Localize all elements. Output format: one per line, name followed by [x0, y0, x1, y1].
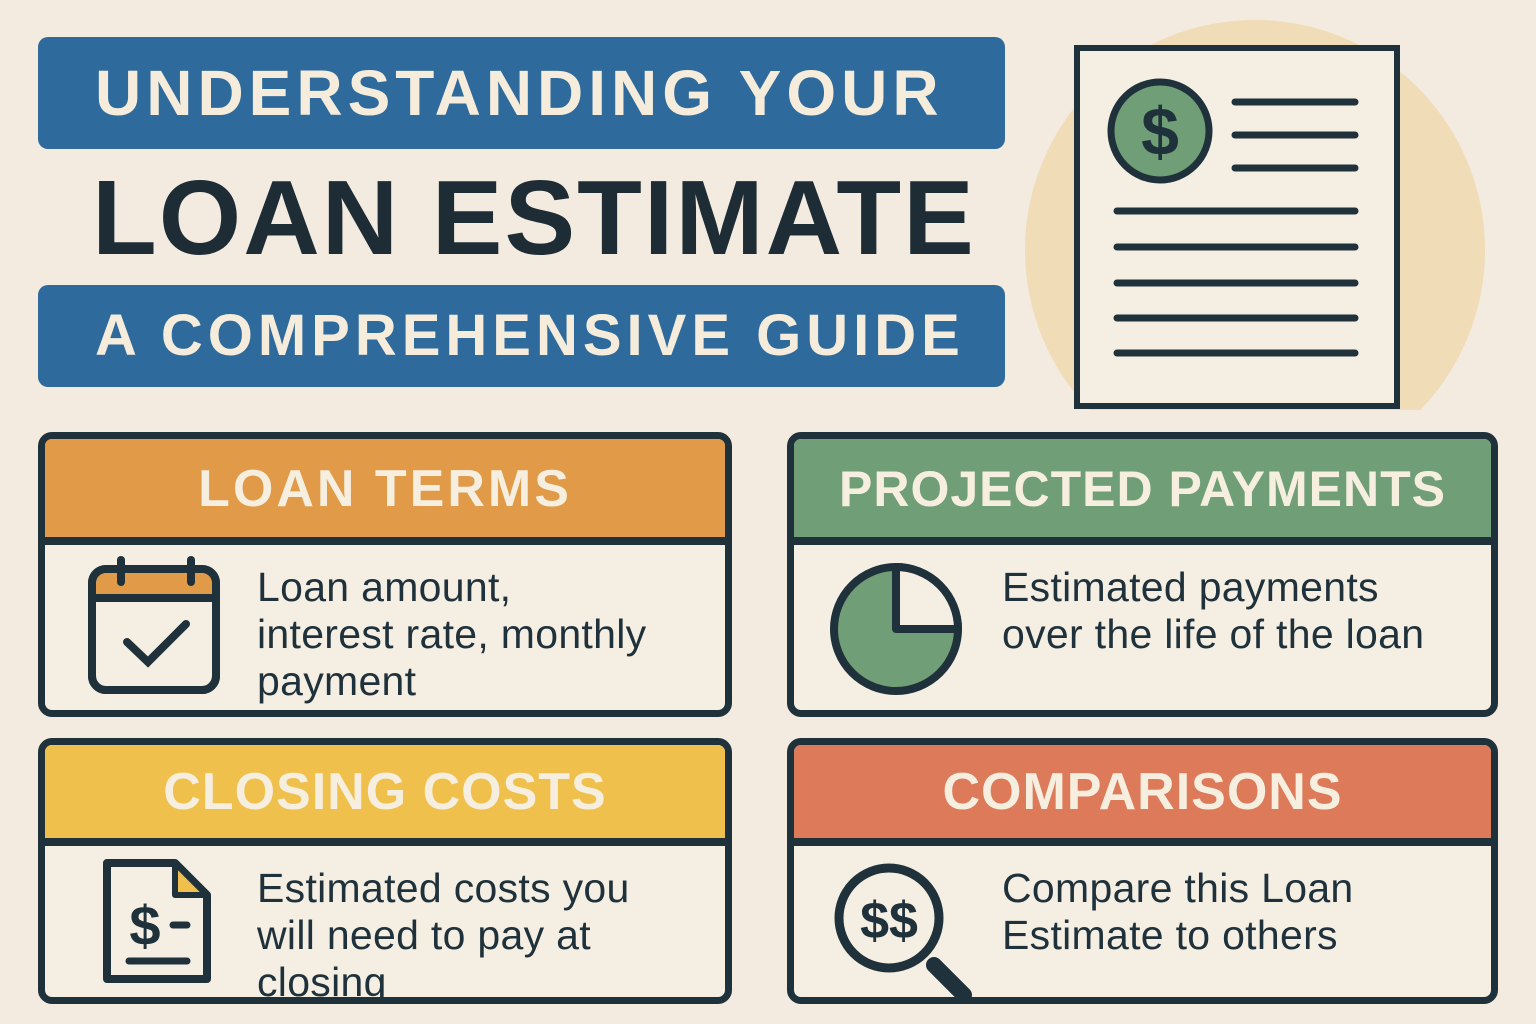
header: projected payments: PROJECTED PAYMENTS [839, 461, 1446, 517]
icon: magnifier with dollars [834, 864, 972, 997]
title banner: understanding your [38, 37, 1005, 149]
text: projected payments: Estimated payments [1002, 564, 1379, 610]
panel: closing costs [38, 738, 732, 1004]
icon: calendar [88, 556, 220, 694]
text: projected payments: over the life of the loan [1002, 611, 1424, 657]
panel: comparisons [787, 738, 1498, 1004]
title banner: understanding your: UNDERSTANDING YOUR [95, 57, 944, 129]
icon: dollar document: $ [129, 894, 161, 957]
header: closing costs: CLOSING COSTS [163, 763, 607, 821]
panel: loan terms [38, 432, 732, 717]
text: loan terms: Loan amount, [257, 564, 511, 610]
header: loan terms: LOAN TERMS [198, 460, 572, 518]
header: comparisons: COMPARISONS [942, 763, 1343, 821]
text: loan terms [257, 564, 646, 704]
header: comparisons [794, 745, 1491, 846]
icon: dollar document [103, 859, 211, 983]
icon: pie chart [830, 563, 962, 695]
icon: magnifier with dollars: $$ [860, 892, 918, 950]
header: projected payments [794, 439, 1491, 545]
header: loan terms [45, 439, 725, 545]
subtitle banner: A COMPREHENSIVE GUIDE [95, 303, 965, 368]
text: comparisons: Compare this Loan [1002, 865, 1354, 911]
text: projected payments [1002, 564, 1424, 657]
title: loan estimate: LOAN ESTIMATE [92, 159, 976, 277]
text: closing costs: closing [257, 959, 387, 1004]
text: closing costs: will need to pay at [257, 912, 591, 958]
text: closing costs [257, 865, 630, 1004]
text: comparisons [1002, 865, 1354, 958]
header: closing costs [45, 745, 725, 846]
panel: projected payments [787, 432, 1498, 717]
subtitle banner [38, 285, 1005, 387]
text: loan terms: interest rate, monthly [257, 611, 646, 657]
text: closing costs: Estimated costs you [257, 865, 630, 911]
decorative circle and document icon: $ [1141, 94, 1179, 170]
text: comparisons: Estimate to others [1002, 912, 1338, 958]
text: loan terms: payment [257, 658, 416, 704]
decorative circle and document icon [1025, 20, 1485, 410]
